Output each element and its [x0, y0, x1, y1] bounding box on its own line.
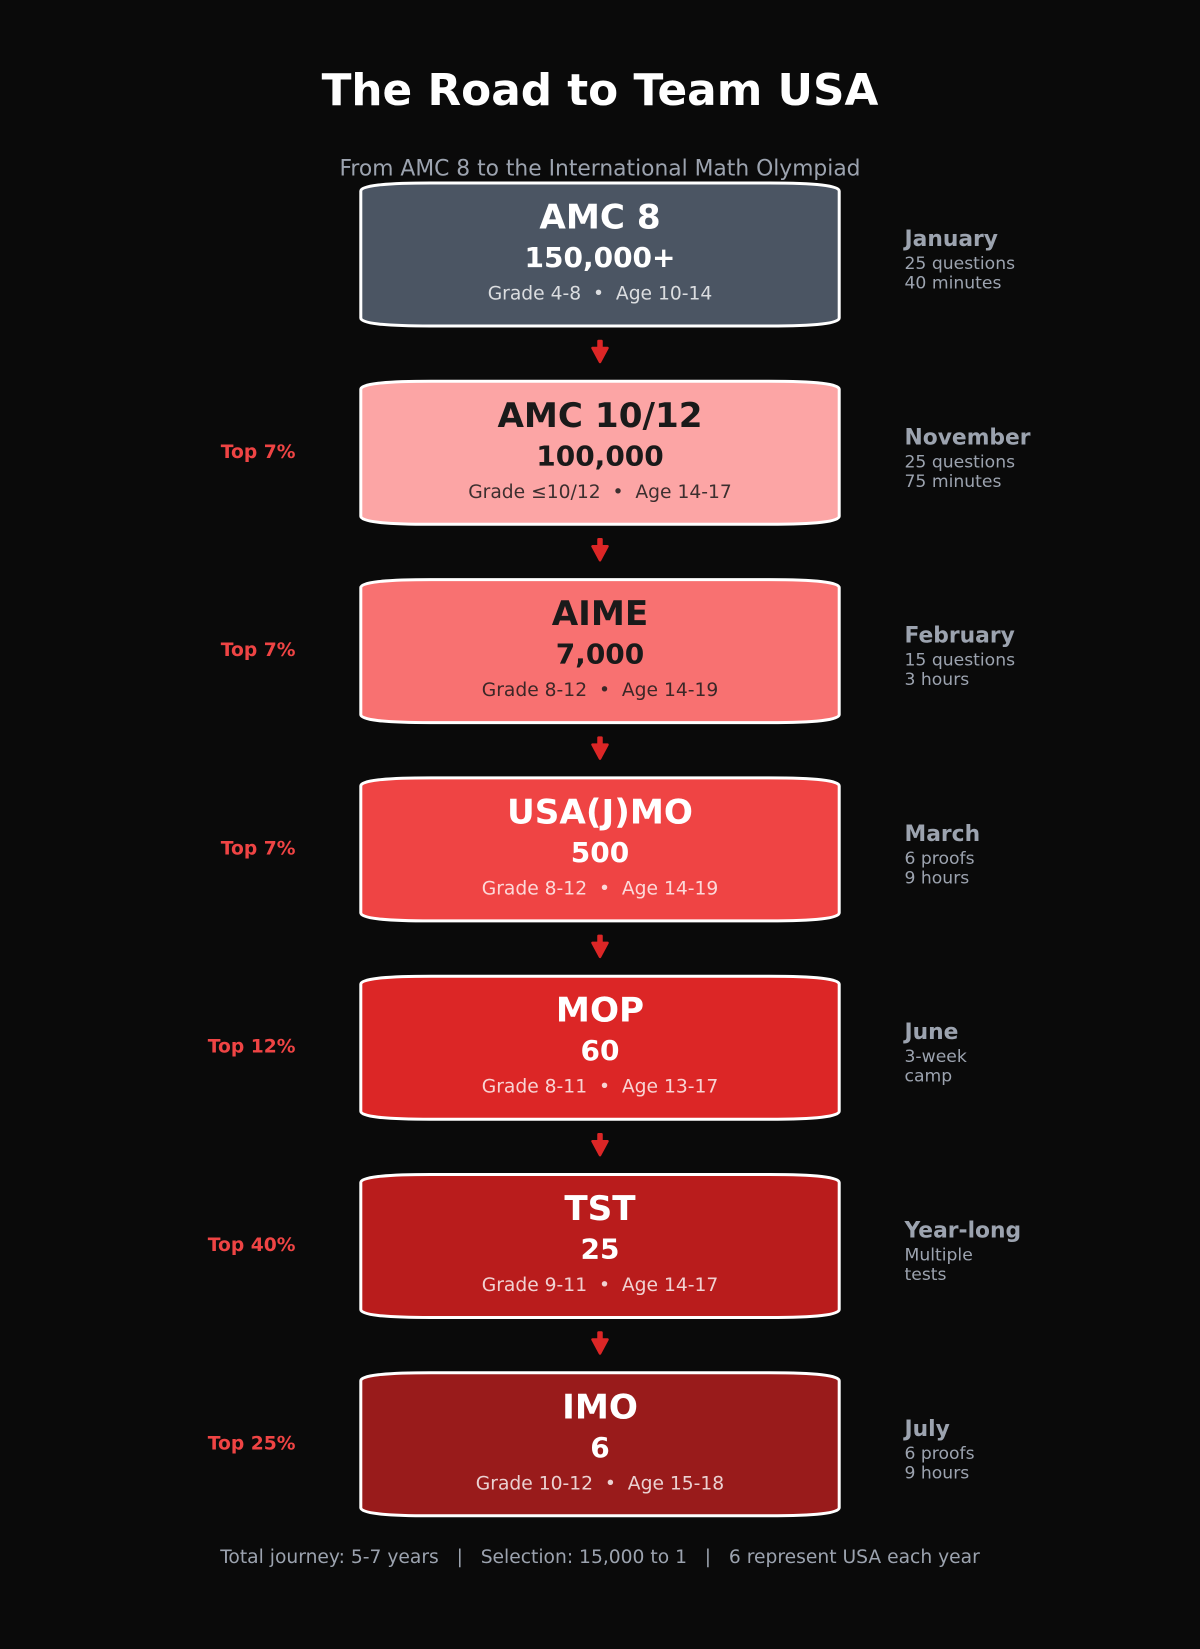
- timing: February: 15 questions: [904, 651, 1015, 671]
- box: AIME: [361, 580, 839, 723]
- subtitle: From AMC 8 to the International Math Olympiad: [339, 156, 861, 182]
- timing: Year-long: Year-long: [904, 1218, 1021, 1244]
- title: The Road to Team USA: [322, 65, 879, 116]
- stage: IMO: [208, 1373, 975, 1516]
- timing: March: 6 proofs: [904, 849, 975, 869]
- timing: November: 75 minutes: [904, 472, 1001, 492]
- box text: USA(J)MO: [482, 792, 718, 899]
- arrow: [592, 1332, 608, 1354]
- stage: USA(J)MO: [221, 778, 980, 921]
- timing: February: [904, 624, 1015, 690]
- timing: January: 40 minutes: [904, 274, 1001, 294]
- stage: AMC 10/12: [221, 381, 1031, 524]
- selection rate: Top 40%: [208, 1235, 296, 1256]
- timing: March: March: [904, 822, 980, 847]
- box: USA(J)MO: [361, 778, 839, 921]
- timing: June: June: [902, 1020, 958, 1045]
- timing: March: [904, 822, 980, 888]
- selection rate: Top 7%: [221, 442, 296, 463]
- selection rate: Top 25%: [208, 1433, 296, 1454]
- box text: AMC 10/12: Grade ≤10/12 • Age 14-17: [468, 482, 732, 503]
- timing: Year-long: [904, 1218, 1021, 1285]
- box text: MOP: Grade 8-11 • Age 13-17: [482, 1077, 718, 1098]
- selection rate: Top 7%: [221, 640, 296, 661]
- box text: AMC 10/12: [468, 396, 732, 503]
- box text: TST: Grade 9-11 • Age 14-17: [482, 1275, 718, 1296]
- timing: July: 9 hours: [904, 1463, 969, 1483]
- box text: AMC 8: [488, 198, 712, 304]
- box: IMO: [361, 1373, 839, 1516]
- timing: January: 25 questions: [904, 254, 1015, 274]
- box text: USA(J)MO: Grade 8-12 • Age 14-19: [482, 878, 718, 899]
- box text: MOP: MOP: [556, 991, 644, 1031]
- box text: IMO: Grade 10-12 • Age 15-18: [476, 1473, 724, 1494]
- box text: USA(J)MO: USA(J)MO: [507, 792, 693, 832]
- box text: IMO: 6: [590, 1431, 610, 1464]
- timing: February: 3 hours: [904, 670, 969, 690]
- box text: AIME: [482, 594, 718, 701]
- selection rate: Top 7%: [221, 838, 296, 859]
- timing: June: [902, 1020, 967, 1087]
- selection rate: Top 12%: [208, 1037, 296, 1058]
- box text: MOP: 60: [581, 1034, 619, 1067]
- arrow: [592, 738, 608, 759]
- timing: June: 3-week: [904, 1047, 967, 1067]
- box: AMC 10/12: [361, 381, 839, 524]
- box text: TST: 25: [581, 1232, 619, 1266]
- box text: IMO: IMO: [562, 1387, 638, 1427]
- box text: AIME: Grade 8-12 • Age 14-19: [482, 680, 718, 701]
- footer summary: Total journey: 5-7 years | Selection: 15,000 to 1 | 6 represent USA each year: [219, 1547, 980, 1568]
- timing: July: 6 proofs: [904, 1444, 975, 1464]
- box text: AIME: 7,000: [556, 638, 644, 671]
- box text: IMO: [476, 1387, 724, 1494]
- timing: November: November: [904, 425, 1031, 450]
- stage: AIME: [221, 580, 1015, 723]
- box text: AMC 10/12: AMC 10/12: [497, 396, 703, 436]
- box text: AMC 8: 150,000+: [524, 241, 676, 274]
- arrow: [592, 539, 608, 560]
- box text: AMC 8: AMC 8: [539, 198, 661, 238]
- timing: March: 9 hours: [904, 868, 969, 888]
- arrow: [592, 1134, 608, 1155]
- box text: TST: TST: [564, 1189, 636, 1229]
- box text: MOP: [482, 991, 718, 1098]
- timing: February: February: [904, 624, 1015, 649]
- timing: January: [902, 227, 1015, 294]
- arrow: [592, 341, 608, 362]
- timing: July: July: [902, 1417, 950, 1442]
- stage: MOP: [208, 976, 967, 1119]
- timing: June: camp: [904, 1067, 952, 1087]
- timing: Year-long: tests: [904, 1265, 947, 1285]
- timing: November: [904, 425, 1031, 492]
- box: AMC 8: [361, 183, 839, 326]
- box: TST: [361, 1174, 839, 1318]
- arrow: [592, 936, 608, 957]
- stage: TST: [208, 1174, 1021, 1318]
- timing: January: January: [902, 227, 998, 252]
- box text: AMC 8: Grade 4-8 • Age 10-14: [488, 284, 712, 304]
- timing: July: [902, 1417, 975, 1483]
- box: MOP: [361, 976, 839, 1119]
- timing: November: 25 questions: [904, 452, 1015, 472]
- timing: Year-long: Multiple: [904, 1246, 973, 1266]
- box text: TST: [482, 1189, 718, 1296]
- box text: AMC 10/12: 100,000: [536, 439, 664, 472]
- box text: AIME: AIME: [552, 594, 648, 634]
- box text: USA(J)MO: 500: [571, 836, 629, 869]
- stage: AMC 8: [361, 183, 1015, 326]
